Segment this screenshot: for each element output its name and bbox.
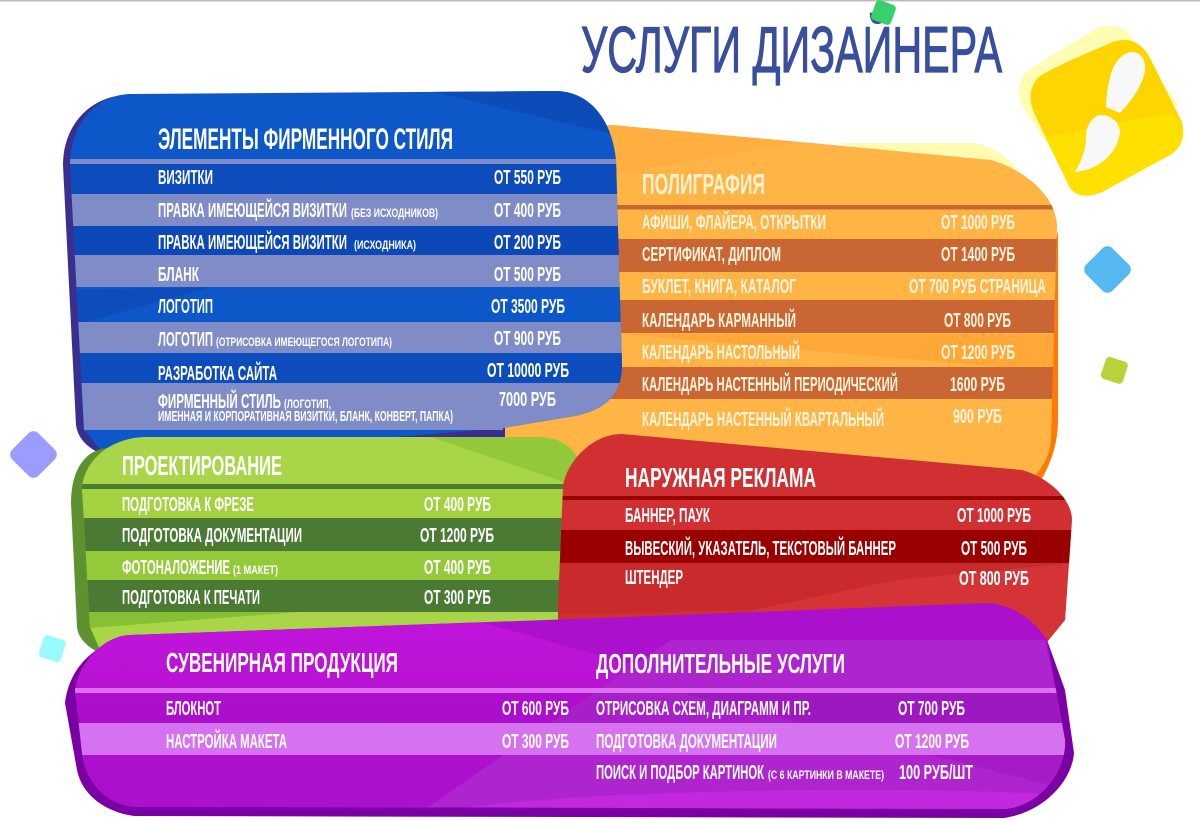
icon: paint brush badge	[1019, 26, 1183, 196]
rows: price list: СЕРТИФИКАТ, ДИПЛОМ	[642, 244, 781, 266]
rows: price list: ОТ 3500 РУБ	[491, 296, 565, 318]
heading: ЭЛЕМЕНТЫ ФИРМЕННОГО СТИЛЯ	[158, 123, 453, 156]
icon: small green square	[870, 0, 897, 26]
panel: corporate identity	[60, 91, 630, 455]
panel: polygraphy	[500, 125, 1060, 482]
icon: lavender diamond	[7, 428, 60, 481]
rows: price list: АФИШИ, ФЛАЙЕРА, ОТКРЫТКИ	[642, 210, 826, 234]
rows: price list: ОТ 700 РУБ	[898, 698, 965, 720]
rows: price list: ПОИСК И ПОДБОР КАРТИНОК	[596, 762, 764, 784]
rows: price list: ЛОГОТИП	[158, 329, 213, 351]
rows: price list: ОТ 400 РУБ	[494, 200, 561, 222]
rows: price list: БУКЛЕТ, КНИГА, КАТАЛОГ	[642, 276, 796, 298]
rows: price list: 7000 РУБ	[499, 389, 556, 411]
rows: price list: ОТ 10000 РУБ	[487, 360, 569, 382]
rows: price list: ФИРМЕННЫЙ СТИЛЬ	[158, 389, 281, 413]
rows: price list: РАЗРАБОТКА САЙТА	[158, 361, 277, 385]
rows: price list: КАЛЕНДАРЬ КАРМАННЫЙ	[642, 308, 796, 332]
rows: price list: КАЛЕНДАРЬ НАСТЕННЫЙ КВАРТАЛЬНЫЙ	[642, 407, 884, 431]
heading: НАРУЖНАЯ РЕКЛАМА	[625, 462, 816, 493]
rows: price list: ОТРИСОВКА СХЕМ, ДИАГРАММ И ПР.	[596, 698, 811, 720]
heading: ПОЛИГРАФИЯ	[642, 169, 765, 201]
rows: price list: ОТ 300 РУБ	[424, 587, 491, 609]
rows: price list: ОТ 1000 РУБ	[957, 505, 1031, 527]
rows: price list: ОТ 200 РУБ	[494, 232, 561, 254]
rows: price list: ОТ 1200 РУБ	[895, 731, 969, 753]
rows: price list: ОТ 900 РУБ	[494, 328, 561, 350]
rows: price list: ПОДГОТОВКА ДОКУМЕНТАЦИИ	[122, 525, 302, 547]
heading: additional services: ДОПОЛНИТЕЛЬНЫЕ УСЛУГИ	[596, 648, 845, 679]
rows: price list: ОТ 550 РУБ	[494, 167, 561, 189]
rows: price list: ШТЕНДЕР	[625, 567, 683, 589]
rows: price list: КАЛЕНДАРЬ НАСТОЛЬНЫЙ	[642, 340, 800, 364]
panel: outdoor advertising	[555, 434, 1075, 645]
rows: price list: ОТ 800 РУБ	[959, 568, 1029, 590]
rows: price list: ОТ 1200 РУБ	[420, 525, 494, 547]
rows: price list: КАЛЕНДАРЬ НАСТЕННЫЙ ПЕРИОДИЧЕСКИЙ	[642, 372, 898, 396]
rows: price list: (ОТРИСОВКА ИМЕЮЩЕГОСЯ ЛОГОТИПА)	[216, 335, 392, 349]
rows: price list: ПОДГОТОВКА К ФРЕЗЕ	[122, 494, 254, 516]
rows: price list: ВЫВЕСКИЙ, УКАЗАТЕЛЬ, ТЕКСТОВЫЙ БАННЕР	[625, 536, 896, 560]
icon: cyan square	[38, 634, 67, 663]
heading: souvenirs: СУВЕНИРНАЯ ПРОДУКЦИЯ	[166, 647, 398, 678]
rows: price list: ПОДГОТОВКА ДОКУМЕНТАЦИИ	[596, 731, 777, 753]
rows: price list: ПРАВКА ИМЕЮЩЕЙСЯ ВИЗИТКИ	[158, 230, 347, 254]
rows: price list	[555, 505, 1075, 590]
rows: price list: ОТ 400 РУБ	[424, 557, 491, 579]
rows: price list: ПОДГОТОВКА К ПЕЧАТИ	[122, 587, 260, 609]
rows: price list: ФОТОНАЛОЖЕНИЕ	[122, 557, 230, 579]
rows: price list: ОТ 500 РУБ	[961, 538, 1027, 560]
rows: price list: ПРАВКА ИМЕЮЩЕЙСЯ ВИЗИТКИ	[158, 198, 347, 222]
icon: blue diamond	[1081, 243, 1134, 296]
rows: price list: (С 6 КАРТИНКИ В МАКЕТЕ)	[768, 768, 884, 782]
rows: price list: 1600 РУБ	[950, 374, 1005, 396]
rows: price list: (ЛОГОТИП,	[284, 397, 331, 411]
rows: price list	[60, 164, 630, 430]
rows: price list	[60, 693, 1070, 784]
icon: lime square	[1100, 356, 1129, 385]
rows: price list: ОТ 400 РУБ	[424, 494, 491, 516]
rows: price list	[70, 489, 580, 612]
rows: price list: ОТ 300 РУБ	[502, 731, 569, 753]
rows: price list: ОТ 700 РУБ СТРАНИЦА	[909, 276, 1046, 298]
rows: price list: ОТ 500 РУБ	[494, 264, 561, 286]
rows: price list: ОТ 800 РУБ	[944, 310, 1011, 332]
rows: price list: ОТ 1400 РУБ	[941, 244, 1015, 266]
rows: price list: БЛОКНОТ	[166, 698, 221, 720]
panel: souvenirs and additional services	[60, 603, 1074, 818]
rows: price list: БАННЕР, ПАУК	[625, 505, 710, 527]
rows: price list: БЛАНК	[158, 264, 199, 286]
rows: price list: (ИСХОДНИКА)	[354, 238, 416, 252]
rows: price list: (1 МАКЕТ)	[233, 563, 278, 577]
rows: price list: ОТ 1000 РУБ	[941, 212, 1015, 234]
rows: price list	[600, 210, 1060, 431]
rows: price list: ОТ 1200 РУБ	[941, 342, 1015, 364]
rows: price list: ВИЗИТКИ	[158, 167, 213, 189]
panel: design engineering	[70, 437, 580, 653]
rows: price list: (БЕЗ ИСХОДНИКОВ)	[351, 206, 438, 220]
heading: ПРОЕКТИРОВАНИЕ	[122, 450, 282, 481]
rows: price list: ИМЕННАЯ И КОРПОРАТИВНАЯ ВИЗИТКИ, БЛАНК, КОНВЕРТ, ПАПКА)	[158, 409, 453, 425]
rows: price list: НАСТРОЙКА МАКЕТА	[166, 729, 287, 753]
rows: price list: ЛОГОТИП	[158, 296, 213, 318]
rows: price list: 900 РУБ	[953, 406, 1002, 428]
rows: price list: 100 РУБ/ШТ	[899, 762, 973, 784]
rows: price list: ОТ 600 РУБ	[502, 698, 569, 720]
